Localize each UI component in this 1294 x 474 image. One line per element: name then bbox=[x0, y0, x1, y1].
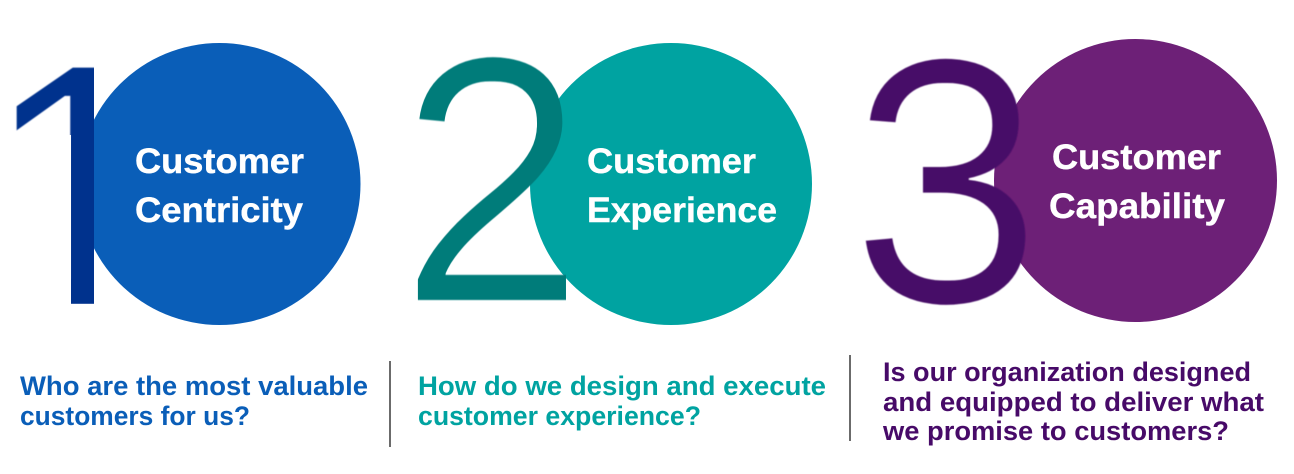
heading: customer capability bbox=[1049, 138, 1226, 226]
question: customer centricity: Who are the most valuable bbox=[20, 371, 368, 401]
panel: customer capability bbox=[850, 0, 1277, 446]
heading: customer centricity: Centricity bbox=[135, 191, 304, 230]
heading: customer experience bbox=[587, 142, 777, 230]
question: customer experience bbox=[418, 371, 826, 431]
question: customer capability: Is our organization designed bbox=[883, 357, 1251, 387]
circle: customer capability bbox=[994, 39, 1277, 322]
question: customer capability: we promise to customers? bbox=[882, 416, 1229, 446]
circle: customer centricity bbox=[78, 43, 360, 325]
question: customer centricity: customers for us? bbox=[20, 401, 250, 431]
question: customer capability: and equipped to deliver what bbox=[883, 387, 1264, 417]
heading: customer centricity: Customer bbox=[135, 142, 304, 181]
heading: customer capability: Capability bbox=[1049, 187, 1226, 226]
heading: customer capability: Customer bbox=[1052, 138, 1221, 177]
panel: customer centricity bbox=[16, 43, 368, 426]
question: customer experience: How do we design and execute bbox=[418, 371, 826, 401]
heading: customer experience: Experience bbox=[587, 191, 777, 230]
circle: customer experience bbox=[530, 43, 812, 325]
heading: customer centricity bbox=[135, 142, 304, 230]
heading: customer experience: Customer bbox=[587, 142, 756, 181]
question: customer capability bbox=[882, 357, 1264, 446]
question: customer experience: customer experience? bbox=[418, 401, 701, 431]
panel: customer experience bbox=[398, 0, 826, 431]
question: customer centricity bbox=[20, 371, 368, 431]
